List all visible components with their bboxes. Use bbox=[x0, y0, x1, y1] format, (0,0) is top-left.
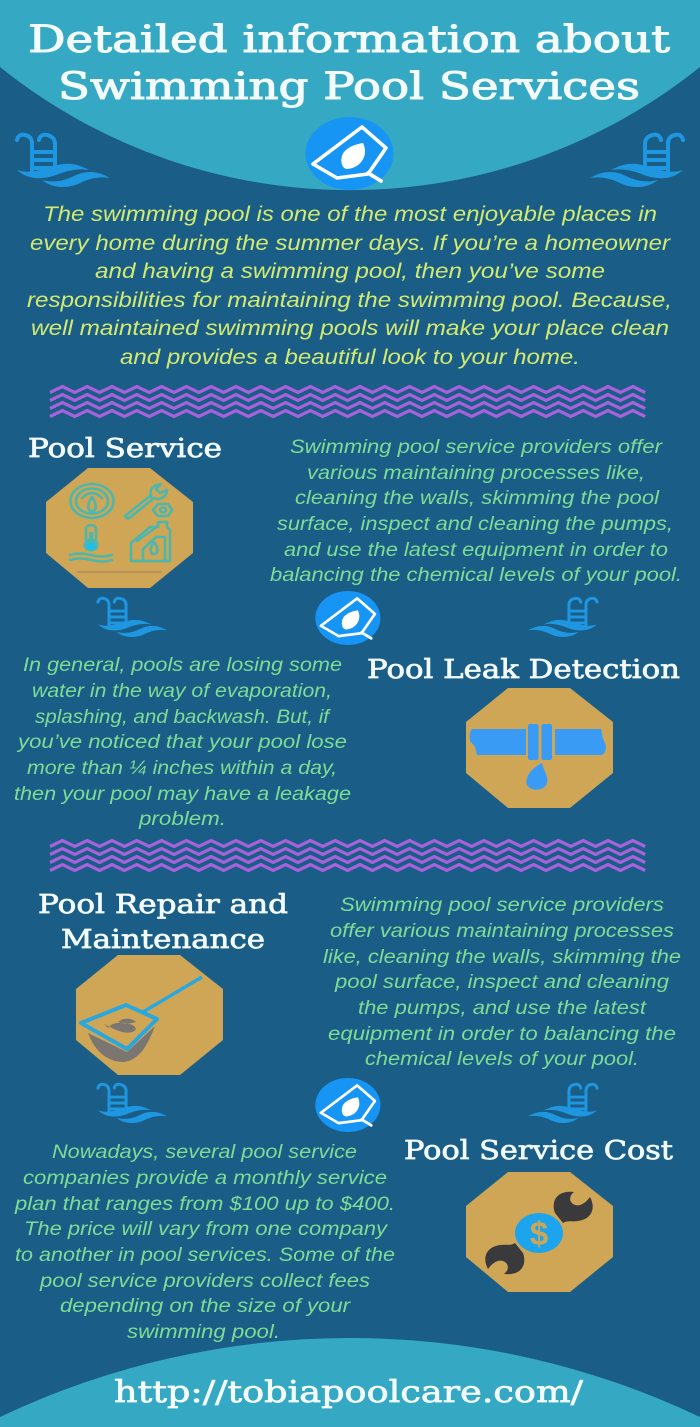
repair text: offer various maintaining processes bbox=[330, 921, 675, 942]
leak text: In general, pools are losing some bbox=[23, 655, 342, 676]
heading: pool repair and maintenance: Pool Repair and bbox=[38, 890, 288, 920]
leak text: problem. bbox=[138, 809, 226, 830]
pool service text: various maintaining processes like, bbox=[307, 463, 645, 484]
repair text: the pumps, and use the latest bbox=[358, 998, 647, 1019]
repair text: chemical levels of your pool. bbox=[365, 1049, 639, 1070]
intro text: and provides a beautiful look to your home. bbox=[120, 346, 580, 369]
heading: pool service: Pool Service bbox=[28, 434, 222, 464]
pool service text: cleaning the walls, skimming the pool bbox=[295, 488, 660, 509]
repair text: pool surface, inspect and cleaning bbox=[334, 972, 669, 993]
repair text: like, cleaning the walls, skimming the bbox=[323, 947, 681, 968]
heading: pool leak detection: Pool Leak Detection bbox=[367, 655, 680, 685]
cost text: pool service providers collect fees bbox=[39, 1271, 371, 1292]
cost text: plan that ranges from $100 up to $400. bbox=[14, 1194, 395, 1215]
intro text: The swimming pool is one of the most enjoyable places in bbox=[43, 203, 657, 226]
icon: skimmer row 2 bbox=[315, 1078, 380, 1132]
heading: pool service cost: Pool Service Cost bbox=[404, 1136, 674, 1166]
icon: cost octagon bbox=[466, 1172, 613, 1292]
repair text: Swimming pool service providers bbox=[340, 895, 665, 916]
cost text: Nowadays, several pool service bbox=[52, 1142, 357, 1163]
icon: ladder row 1 right bbox=[528, 598, 597, 637]
intro text bbox=[27, 203, 672, 369]
leak text bbox=[14, 655, 351, 830]
repair text: equipment in order to balancing the bbox=[328, 1024, 676, 1045]
cost text: depending on the size of your bbox=[60, 1296, 351, 1317]
pool service text: surface, inspect and cleaning the pumps, bbox=[277, 514, 673, 535]
heading: pool repair and maintenance: Maintenance bbox=[61, 925, 265, 955]
title: Swimming Pool Services bbox=[58, 65, 640, 108]
header arc bbox=[0, 0, 700, 190]
icon: pool service octagon bbox=[46, 468, 193, 588]
icon: skimmer row 1 bbox=[315, 591, 380, 645]
zigzag band middle bbox=[50, 840, 645, 870]
icon: ladder row 1 left bbox=[98, 598, 167, 637]
icon: repair octagon bbox=[76, 955, 223, 1075]
cost text: swimming pool. bbox=[127, 1322, 280, 1343]
icon: leak octagon bbox=[466, 688, 613, 808]
repair text bbox=[323, 895, 681, 1070]
leak text: more than ¼ inches within a day, bbox=[27, 758, 337, 779]
icon: skimmer header bbox=[306, 117, 394, 190]
cost text: companies provide a monthly service bbox=[23, 1168, 387, 1189]
pool service text: balancing the chemical levels of your pool. bbox=[270, 565, 682, 586]
icon: ladder header right bbox=[590, 135, 683, 187]
icon: ladder row 2 right bbox=[528, 1084, 597, 1123]
intro text: well maintained swimming pools will make your place clean bbox=[31, 317, 669, 340]
footer url: http://tobiapoolcare.com/ bbox=[114, 1375, 584, 1410]
intro text: and having a swimming pool, then you’ve some bbox=[95, 260, 605, 283]
leak text: water in the way of evaporation, bbox=[32, 681, 332, 702]
pool service text bbox=[270, 437, 682, 586]
leak text: you’ve noticed that your pool lose bbox=[16, 732, 347, 753]
cost text bbox=[14, 1142, 395, 1343]
cost text: The price will vary from one company bbox=[24, 1219, 389, 1240]
intro text: responsibilities for maintaining the swimming pool. Because, bbox=[27, 289, 672, 312]
title bbox=[28, 18, 670, 108]
intro text: every home during the summer days. If you’re a homeowner bbox=[30, 232, 671, 255]
footer arc bbox=[0, 1338, 700, 1427]
leak text: then your pool may have a leakage bbox=[14, 784, 351, 805]
heading: pool repair and maintenance bbox=[38, 890, 288, 955]
icon: cost octagon: $ bbox=[530, 1215, 548, 1252]
leak text: splashing, and backwash. But, if bbox=[35, 707, 331, 728]
pool service text: Swimming pool service providers offer bbox=[290, 437, 663, 458]
zigzag band top bbox=[50, 386, 645, 416]
title: Detailed information about bbox=[28, 18, 670, 61]
pool service text: and use the latest equipment in order to bbox=[284, 540, 668, 561]
cost text: to another in pool services. Some of the bbox=[15, 1245, 395, 1266]
icon: ladder header left bbox=[17, 135, 110, 187]
icon: ladder row 2 left bbox=[98, 1084, 167, 1123]
